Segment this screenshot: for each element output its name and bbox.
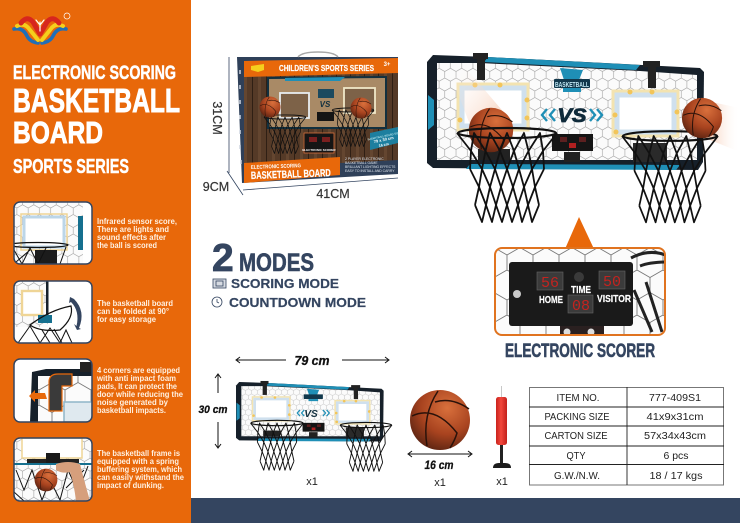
timer display: 08 [572,298,590,315]
title block [13,63,180,178]
ball motion trails [450,68,740,152]
modes heading: COUNTDOWN MODE [229,296,366,310]
scorer labels [539,286,631,304]
feature text: infrared sensor: sound effects after [97,233,166,242]
feature text: folding [97,299,173,324]
right hoop [622,131,718,222]
feature text: dunking: The basketball frame is [97,449,181,458]
height dimension: 30 cm [198,404,228,416]
feature text: foam pads: 4 corners are equipped [97,366,180,375]
feature text: infrared sensor: There are lights and [97,225,169,234]
box header band: 3+ [384,62,391,68]
feature text: foam pads: door while reducing the [97,390,184,399]
modes heading [212,237,366,310]
box dimension lines and labels: 9CM [203,180,229,194]
timer display [568,295,593,315]
icon: scoring display [213,279,226,288]
feature photo: foam pads [14,359,92,422]
specification table: 41x9x31cm [646,412,704,423]
specification table: CARTON SIZE [544,431,608,442]
specification table: QTY [566,451,586,462]
ball size dimension [408,451,472,457]
right ball [682,98,722,138]
feature photo: folding [14,281,92,343]
feature text: infrared sensor: Infrared sensor score, [97,217,177,226]
small board [236,381,384,441]
contents: basketball: 16 cm [424,458,454,472]
box bottom title band [244,157,340,183]
visitor score display: 50 [603,274,621,291]
title block: BASKETBALL [13,83,180,120]
modes heading: MODES [239,249,314,277]
title block: SPORTS SERIES [13,156,129,178]
feature text: dunking [97,449,185,490]
scorer inset on box: ELECTRONIC SCORER [302,148,336,152]
feature text: folding: The basketball board [97,299,173,308]
width dimension [236,353,389,368]
contents: air pump [493,386,511,488]
width dimension: 79 cm [294,353,330,368]
box bottom title band: ELECTRONIC SCORING [251,163,301,171]
footer bar [191,498,740,523]
feature text: foam pads: pads, It can protect the [97,382,177,391]
callout pointer [565,217,594,249]
specification table: 18 / 17 kgs [650,471,702,482]
box feature bullets: EASY TO INSTALL AND CARRY [345,169,395,173]
title block: BOARD [13,115,103,150]
box header band: CHILDREN'S SPORTS SERIES [279,63,374,73]
specification table: PACKING SIZE [544,412,610,423]
board logo text: BASKETBALL [555,80,589,89]
product box [237,52,401,183]
specification table: 57x34x43cm [644,431,706,442]
contents: board with dimensions [198,353,392,488]
feature text: folding: for easy storage [97,315,157,324]
left ball [469,108,513,152]
main product: basketball board [427,53,740,222]
size badge on box: BASKETBALL BOARD SIZE [367,131,401,141]
contents: basketball [408,390,472,489]
box feature bullets [345,157,396,173]
size badge on box: 79 x 30 cm [373,135,395,144]
box dimension lines and labels: 41CM [316,187,350,201]
feature text: folding: can be folded at 90° [97,307,169,316]
quantity: x1 [306,476,318,488]
contents: basketball: x1 [434,477,446,489]
box header band [244,58,398,77]
feature text: foam pads: basketball impacts. [97,406,166,415]
feature photo: dunking [14,438,92,501]
scorer caption: ELECTRONIC SCORER [505,341,655,362]
box feature bullets: BASKETBALL GAME [345,161,378,165]
box feature bullets: 2 PLAYER ELECTRONIC [345,157,384,161]
feature text: infrared sensor: the ball is scored [97,241,157,250]
scorer labels: VISITOR [597,294,632,305]
scorer labels: HOME [539,295,563,306]
feature text: dunking: equipped with a spring [97,457,179,466]
contents: air pump: x1 [496,476,508,488]
small VS mark: VS [304,409,318,420]
specification table: ITEM NO. [556,393,600,404]
specification table: 6 pcs [664,451,688,462]
box bottom title band: BASKETBALL BOARD [251,167,331,182]
feature text: dunking: buffering system, which [97,465,182,474]
small right hoop [340,422,392,471]
VS mark on box: VS [320,100,331,109]
visitor score display [599,271,625,291]
small left hoop [250,420,304,470]
feature text: foam pads: with anti impact foam [96,374,176,383]
VS mark: VS [558,106,587,127]
box dimension lines and labels: 31CM [210,101,224,135]
brand logo [14,13,70,43]
modes heading: 2 [212,237,234,280]
box feature bullets: BRILLIANT LIGHTING EFFECTS [345,165,396,169]
electronic scorer callout [495,248,668,336]
scorer inset on box [302,133,336,153]
feature photo: infrared sensor [8,202,92,264]
scorer labels: TIME [571,285,591,296]
feature text: foam pads [96,366,184,415]
size badge on box [367,127,401,150]
box dimension lines and labels [203,57,398,201]
modes heading: SCORING MODE [231,277,339,291]
specification table [529,387,724,485]
height dimension [198,374,228,448]
home score display: 56 [541,275,559,292]
home score display [537,272,563,292]
left hoop [457,128,557,222]
feature text: infrared sensor [97,217,177,250]
feature text: foam pads: noise generated by [97,398,169,407]
specification table: G.W./N.W. [554,471,600,482]
specification table: 777-409S1 [649,393,701,404]
size badge on box: 16 cm [378,142,389,148]
title block: ELECTRONIC SCORING [13,63,176,84]
feature text: dunking: can easily withstand the [97,473,185,482]
icon: clock [212,297,222,307]
icon: curved fold arrow [69,297,82,330]
orange side panel [0,0,191,523]
feature text: dunking: impact of dunking. [97,481,164,490]
